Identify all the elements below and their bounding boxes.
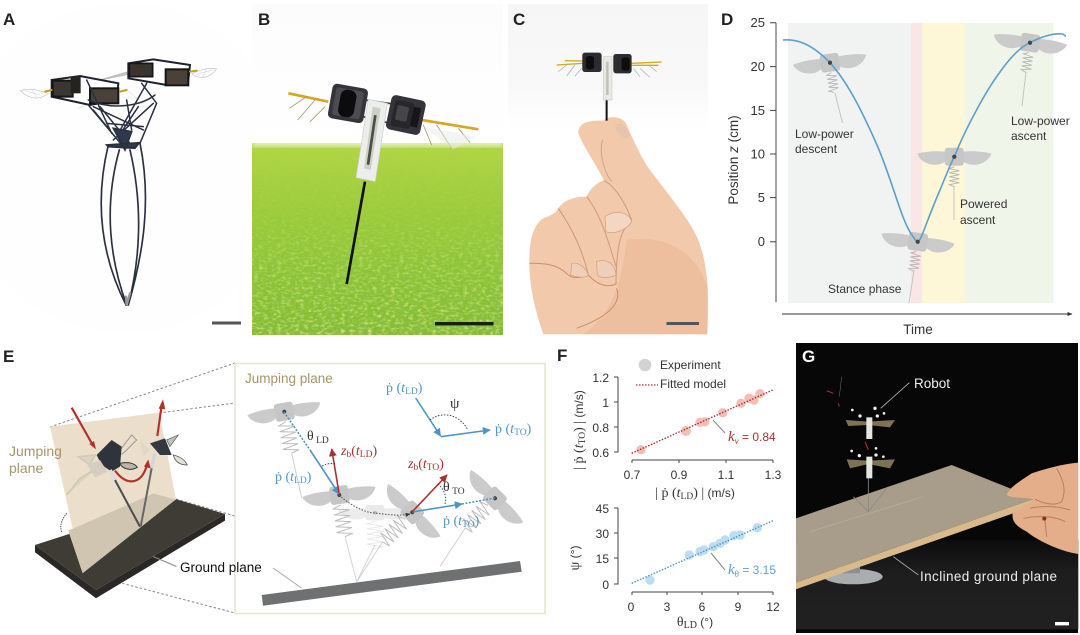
top scatter plot: TO [578,432,588,444]
math labels: ṗ (t [495,422,514,437]
scale bar C [666,322,699,325]
hand [529,53,708,334]
math labels: ( [351,444,356,459]
math labels: ) [307,470,312,485]
panel A: legged robot photo [0,0,290,338]
y axis: 0 [758,234,765,249]
math labels: t [356,444,361,459]
label G: G [802,347,815,366]
bottom scatter plot: 0 [628,600,635,614]
math labels: z [340,444,347,459]
math labels: TO [427,463,439,473]
math labels: ( [418,457,423,472]
phase bands [788,23,1054,303]
robot pose landing [67,435,140,527]
phase labels: ascent [960,213,996,227]
hand [1007,463,1078,554]
math labels: ) [439,457,444,472]
bottom scatter plot: LD [684,620,697,631]
inset title: Jumping plane [245,371,333,386]
bottom scatter plot: θ [735,569,739,579]
top scatter plot: k [728,429,735,445]
label A: A [3,10,15,29]
robot pose take-off [140,435,187,527]
red body axis arrows [332,449,447,512]
phase labels: ascent [1011,129,1047,143]
robot label: Robot [914,376,950,391]
phase labels: Low-power [795,127,854,141]
scale bar A [212,322,241,324]
leader lines [881,383,918,575]
bottom scatter plot: k [728,562,735,578]
time label: Time [903,322,933,337]
panel G: inclined plane photo [796,343,1078,633]
label E: E [3,347,14,366]
ground plane leader [153,556,176,566]
y axis: 10 [751,146,765,162]
robot: powered ascent [917,148,991,220]
phase labels: descent [795,142,838,156]
scale bar B [435,322,494,325]
ground leader [273,568,302,588]
blue velocity arrows [284,398,495,512]
bottom scatter plot: = 3.15 [739,563,776,577]
top scatter plot: LD [681,492,693,502]
legend: Fitted model [660,377,726,391]
y axis: 25 [751,15,765,30]
inclined ground plane label: Inclined ground plane [920,569,1057,584]
bottom scatter plot: 15 [596,552,609,566]
phase labels [795,114,1070,296]
panel E left: 3D jumping plane illustration [3,347,235,613]
bottom scatter plot: 12 [766,600,780,614]
panel C: robot held on finger photo [508,4,708,335]
math labels: θ [307,429,314,444]
time arrow [782,313,1072,315]
angle arcs [322,415,468,504]
top scatter plot: 0.6 [592,446,609,460]
trajectory points [828,41,1032,244]
robot frame and legs [20,59,217,305]
legend [636,358,726,391]
robot poses [827,377,895,512]
math labels: ) [372,444,377,459]
panel E inset: jumping plane detail [235,364,545,614]
top scatter plot: = 0.84 [739,430,776,444]
red arrows [72,403,162,481]
math labels: TO [514,428,527,438]
bottom scatter plot: 30 [596,527,609,541]
label D: D [721,10,733,29]
bottom scatter plot: 0 [602,578,609,592]
math labels: ) [418,381,423,396]
top scatter plot: (m/s) [572,390,586,418]
jumping plane label: plane [9,460,43,476]
top scatter plot: ) | [572,421,587,432]
top scatter plot: 0.7 [624,468,641,482]
robot on finger [557,53,662,121]
jumping plane label: Jumping [9,443,62,459]
math labels: LD [360,450,373,460]
math labels: b [346,450,351,460]
top scatter plot [572,371,782,502]
panel D: position vs time chart [721,10,1072,337]
trajectory curve [783,34,1066,242]
math labels: ψ [450,396,460,412]
top scatter plot: v [735,436,739,446]
robot: low-power ascent [989,29,1068,106]
label B: B [258,10,270,29]
bottom scatter plot: (°) [697,615,713,629]
math labels: ṗ (t [386,381,405,396]
y axis title: Position z (cm) [726,115,741,205]
bottom scatter plot: 9 [735,600,742,614]
top scatter plot: 1 [602,396,609,410]
bottom scatter plot: 6 [699,600,706,614]
top scatter plot: 0.8 [592,421,609,435]
top scatter plot: 1.2 [592,371,609,385]
math labels: ) [475,514,480,529]
phase labels: Stance phase [828,282,902,296]
label C: C [513,10,525,29]
robot poses [246,396,528,582]
bottom scatter plot: 3 [664,600,671,614]
legend: Experiment [660,358,721,372]
panel F: scatter plots [557,346,782,631]
robot: low-power descent [792,49,871,123]
bottom scatter plot: 45 [596,502,609,516]
stand [824,567,883,584]
phase labels: Powered [960,197,1007,211]
top scatter plot: | ṗ (t [572,444,587,470]
ground and plane [35,399,225,598]
math labels: z [407,457,414,472]
math labels: ṗ (t [443,514,462,529]
top scatter plot: 1.3 [765,468,782,482]
math labels: LD [314,436,329,446]
board [796,465,1035,589]
flight path [339,495,410,515]
y axis: 5 [758,190,765,205]
bottom scatter plot: θ [677,615,684,630]
phase labels: Low-power [1011,114,1070,128]
top scatter plot: ) | [693,486,704,501]
math labels: TO [462,520,475,530]
math labels: t [423,457,428,472]
top scatter plot: | ṗ (t [655,486,681,501]
robot [288,83,478,284]
bottom scatter plot: ψ (°) [568,546,583,570]
scale bar G [1055,622,1069,625]
label F: F [557,346,567,365]
top scatter plot: 1.1 [718,468,735,482]
math labels [275,381,532,530]
math labels: θ [443,480,450,495]
ground plane label: Ground plane [180,560,262,575]
table surface [796,540,1078,629]
math labels: b [413,463,418,473]
top scatter plot: (m/s) [708,486,735,500]
math labels: TO [450,487,465,497]
panel B: robot on grass photo [252,4,503,335]
math labels: ṗ (t [275,470,294,485]
math labels: ) [527,422,532,437]
math labels: LD [405,387,418,397]
jumping plane label [9,443,62,476]
robot: stance phase [877,228,956,303]
bottom scatter plot [568,502,780,631]
y axis [751,15,776,302]
callout lines [50,363,235,613]
y axis: 15 [751,103,765,118]
math labels: LD [294,476,307,486]
top scatter plot: 0.9 [671,468,688,482]
inclined ground bar [262,561,522,606]
y axis: 20 [751,59,765,74]
